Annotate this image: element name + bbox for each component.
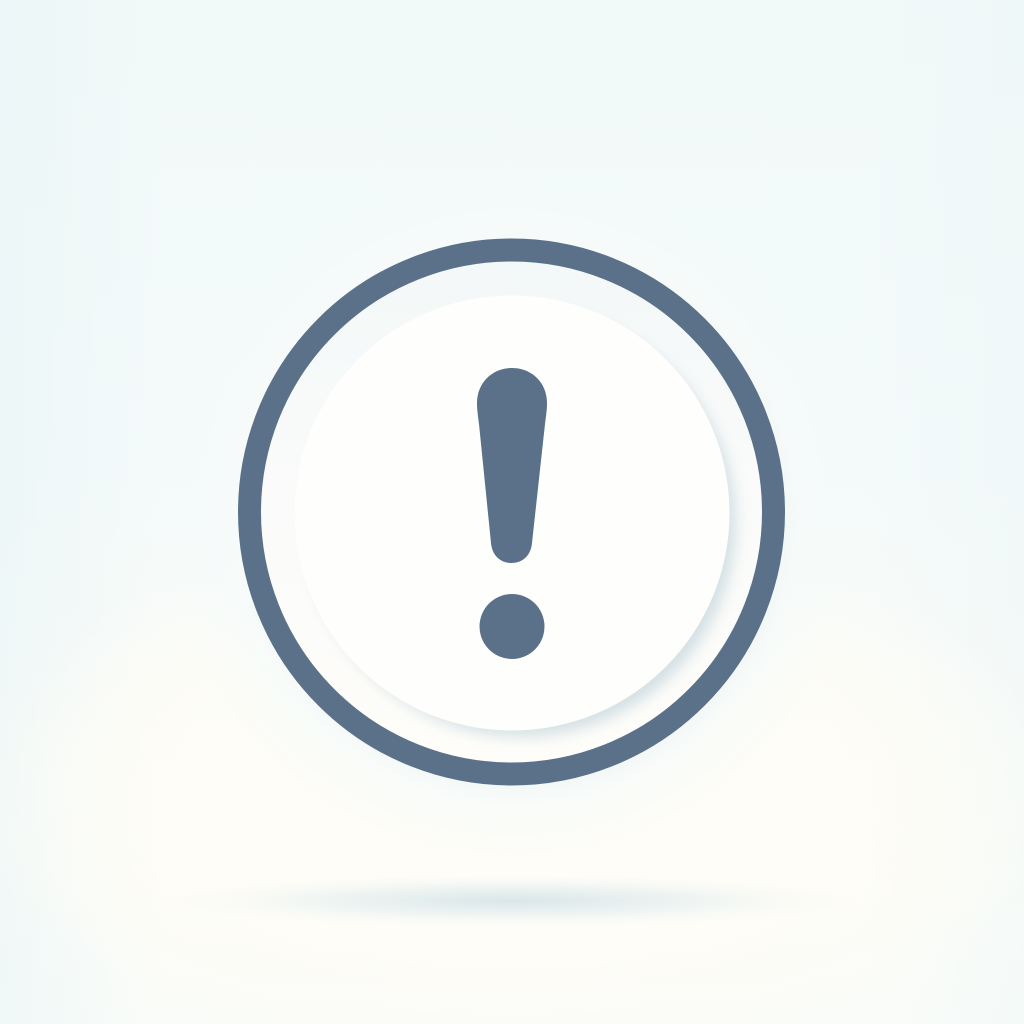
circle interior: [260, 261, 762, 763]
exclamation dot: [480, 594, 544, 659]
exclamation mark: [477, 368, 547, 659]
ground shadow: [167, 875, 857, 927]
outer ring: [250, 250, 774, 774]
warm glow: [0, 520, 1024, 1024]
halo circle: [167, 167, 857, 857]
exclamation stem: [477, 368, 547, 563]
ring outer shadow: [245, 246, 789, 790]
inner white disc: [294, 296, 730, 730]
inner disc shadow: [308, 309, 736, 737]
